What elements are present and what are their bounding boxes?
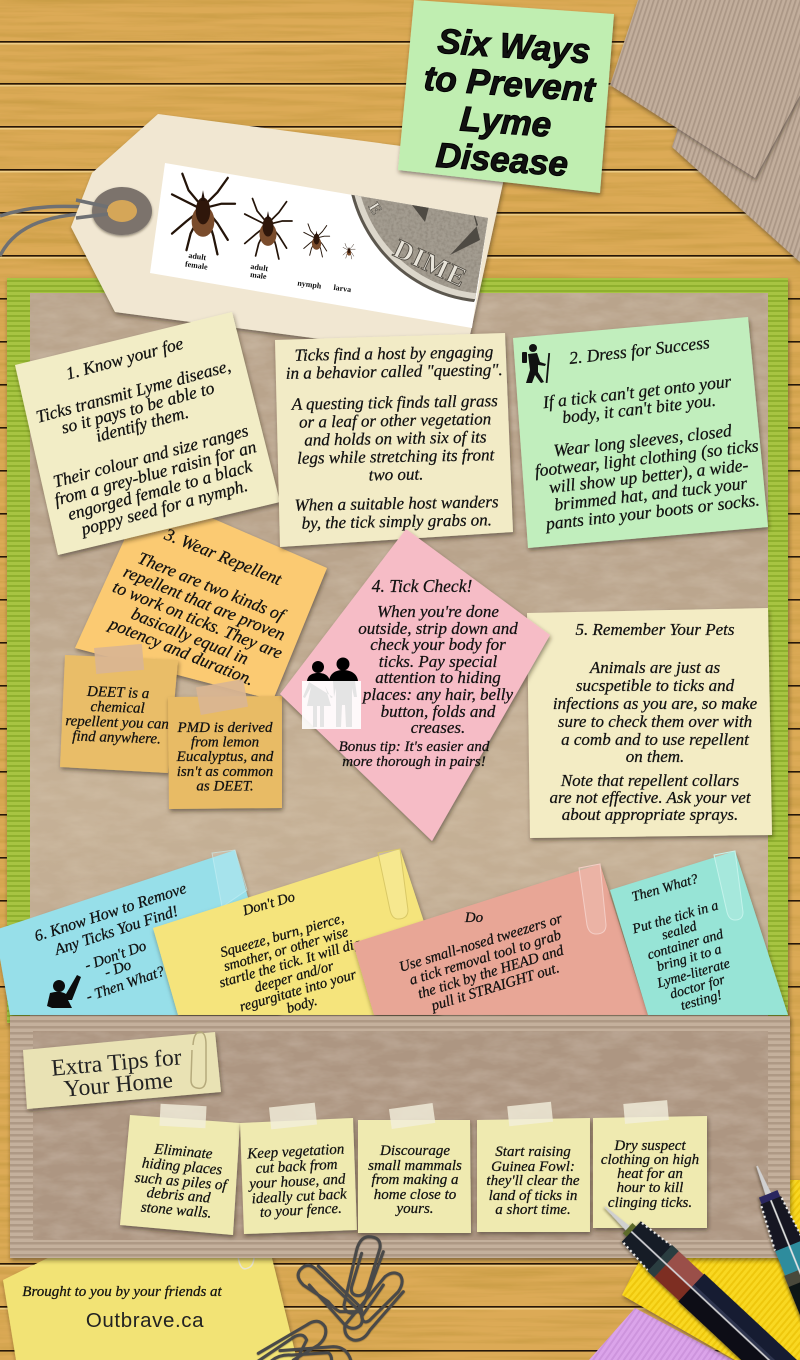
footer yellow note bbox=[3, 1250, 297, 1360]
note: then what: bring it to a bbox=[655, 942, 723, 975]
note: don't do: Don't Do bbox=[240, 889, 297, 919]
note 6: know how to remove: 6. Know How to Remove bbox=[33, 880, 189, 945]
body: attention to hiding bbox=[375, 668, 501, 687]
tip note 1: debris and bbox=[146, 1185, 211, 1207]
body: creases. bbox=[411, 718, 465, 737]
sticky: DEET: DEET is a bbox=[86, 684, 150, 702]
note: then what: sealed bbox=[660, 919, 700, 943]
note: then what bbox=[610, 851, 788, 1021]
note: do: a tick removal tool to grab bbox=[408, 927, 563, 989]
tip note 1 bbox=[120, 1104, 240, 1235]
panel: extra tips corrugated frame bbox=[10, 1016, 790, 1258]
small paperclip bbox=[238, 1256, 254, 1269]
note: questing explanation: two out. bbox=[368, 465, 424, 484]
tip note 1: hiding places bbox=[141, 1155, 223, 1178]
note 2: dress for success: If a tick can't get onto your bbox=[541, 371, 732, 412]
note: then what: container and bbox=[646, 927, 726, 963]
tick labels: larva bbox=[333, 283, 352, 294]
sticky: PMD bbox=[168, 679, 282, 809]
tip note 3: Discourage bbox=[379, 1143, 450, 1159]
tick labels: nymph bbox=[297, 278, 322, 291]
sticky: DEET: chemical bbox=[90, 699, 145, 717]
pen two bbox=[742, 1160, 800, 1360]
note 3: wear repellent: basically equal in bbox=[129, 603, 252, 668]
note 5: remember your pets bbox=[527, 608, 772, 838]
note 2: dress for success: body, it can't bite you. bbox=[561, 390, 717, 427]
tick: nymph bbox=[304, 224, 330, 257]
panel: green striped backing bbox=[7, 278, 788, 1023]
heading: 4. Tick Check! bbox=[372, 576, 472, 596]
note: questing explanation: A questing tick finds tall grass bbox=[291, 391, 498, 414]
note 1: know your foe: poppy seed for a nymph. bbox=[77, 475, 250, 539]
title text: Six Ways bbox=[436, 22, 592, 71]
tip note 2: to your fence. bbox=[259, 1201, 342, 1221]
dime bbox=[351, 194, 488, 302]
tip note 1: such as piles of bbox=[134, 1170, 229, 1194]
heading: extra tips note: Your Home bbox=[63, 1067, 174, 1103]
sticky: DEET bbox=[60, 644, 178, 773]
note 3: wear repellent: potency and duration. bbox=[105, 612, 257, 689]
note: questing explanation: When a suitable host wanders bbox=[294, 492, 499, 515]
note 5: remember your pets: infections as you are, so make bbox=[553, 694, 758, 713]
note: don't do: deeper and/or bbox=[253, 958, 336, 996]
note: don't do: smother, or other wise bbox=[222, 924, 351, 975]
tape bbox=[94, 644, 144, 674]
footer credit: Brought to you by your friends at bbox=[22, 1284, 223, 1300]
title text bbox=[417, 21, 600, 186]
note: then what: Put the tick in a bbox=[630, 898, 720, 938]
tip note 5 bbox=[593, 1100, 707, 1228]
note: do: Use small-nosed tweezers or bbox=[397, 911, 565, 976]
tip note 1: Eliminate bbox=[153, 1141, 213, 1163]
note: questing explanation: in a behavior called "questing". bbox=[286, 360, 503, 383]
note: don't do bbox=[153, 849, 440, 1033]
title text: Disease bbox=[435, 136, 569, 184]
tip note 2: your house, and bbox=[247, 1171, 346, 1193]
note 2: dress for success: 2. Dress for Success bbox=[568, 332, 711, 368]
note: then what: Then What? bbox=[630, 872, 700, 905]
tip note 2: ideally cut back bbox=[251, 1186, 347, 1207]
tip note 4 bbox=[477, 1102, 590, 1232]
body: outside, strip down and bbox=[358, 619, 518, 638]
note 2: dress for success: footwear, light clothing (so ticks bbox=[534, 435, 760, 481]
icon: pointing person bbox=[47, 975, 81, 1008]
tip note 5: clothing on high bbox=[601, 1152, 699, 1168]
tick labels: female bbox=[185, 259, 209, 272]
note 2: dress for success: brimmed hat, and tuck your bbox=[553, 473, 748, 515]
note 6: know how to remove: Any Ticks You Find! bbox=[52, 903, 180, 959]
note 5: remember your pets: 5. Remember Your Pets bbox=[576, 620, 735, 639]
sticky: PMD: from lemon bbox=[191, 734, 259, 750]
tip note 2 bbox=[240, 1103, 357, 1234]
note: don't do: body. bbox=[285, 993, 319, 1017]
note 6: know how to remove bbox=[0, 850, 280, 1015]
note 3: wear repellent: There are two kinds of bbox=[135, 548, 289, 625]
footer brand: Outbrave.ca bbox=[86, 1309, 204, 1332]
note 3: wear repellent: 3. Wear Repellent bbox=[161, 524, 286, 589]
note 6: know how to remove: - Don't Do bbox=[83, 938, 149, 974]
body: ticks. Pay special bbox=[379, 652, 498, 671]
note 5: remember your pets: on them. bbox=[626, 747, 684, 766]
tip note 5: clinging ticks. bbox=[608, 1195, 692, 1211]
heading: extra tips note: Extra Tips for bbox=[50, 1044, 183, 1082]
note 3: wear repellent: repellent that are proven bbox=[121, 561, 288, 644]
tick labels bbox=[185, 251, 352, 294]
tip note 3: home close to bbox=[374, 1187, 457, 1203]
body: button, folds and bbox=[381, 702, 496, 721]
note 6: know how to remove: - Do bbox=[103, 957, 134, 981]
note 6: know how to remove: - Then What? bbox=[84, 964, 167, 1005]
tip note 2: Keep vegetation bbox=[246, 1141, 345, 1163]
heading: extra tips note bbox=[23, 1032, 221, 1109]
tip note 5: hour to kill bbox=[617, 1180, 683, 1196]
tip note 3: from making a bbox=[372, 1172, 458, 1188]
sticky: DEET: find anywhere. bbox=[72, 728, 161, 748]
bonus tip: more thorough in pairs! bbox=[342, 754, 486, 770]
tick labels: adult bbox=[188, 251, 207, 262]
icon: hiker bbox=[522, 344, 550, 383]
paperclip bbox=[714, 851, 743, 920]
tip note 3: small mammals bbox=[368, 1158, 462, 1174]
title note bbox=[398, 0, 614, 193]
tip note 5: heat for an bbox=[617, 1166, 683, 1182]
note 5: remember your pets: Animals are just as bbox=[589, 658, 720, 677]
tip note 2: cut back from bbox=[255, 1157, 338, 1177]
note 1: know your foe: identify them. bbox=[93, 402, 191, 446]
purple corrugated paper bbox=[589, 1308, 733, 1360]
tape bbox=[196, 679, 248, 715]
note: then what: doctor for bbox=[668, 972, 727, 1002]
body: places: any hair, belly bbox=[362, 685, 514, 704]
note: do bbox=[353, 864, 648, 1020]
sticky: DEET: repellent you can bbox=[65, 713, 169, 733]
note 3: wear repellent: to work on ticks. They are bbox=[110, 576, 286, 663]
corrugated cardboard, top right bbox=[610, 0, 800, 262]
icon: couple bbox=[302, 658, 361, 729]
title text: Lyme bbox=[459, 99, 553, 145]
tip note 4: Start raising bbox=[495, 1144, 571, 1160]
note: then what: Lyme-literate bbox=[655, 956, 732, 992]
note: do: Do bbox=[464, 910, 484, 926]
tip note 4: Guinea Fowl: bbox=[491, 1159, 575, 1175]
note: then what: testing! bbox=[679, 988, 724, 1014]
note: questing explanation: legs while stretching its front bbox=[297, 445, 496, 468]
paperclip bbox=[378, 849, 408, 919]
tag paper bbox=[71, 114, 508, 358]
photo: tick sizes beside a dime bbox=[150, 163, 488, 328]
note: don't do: regurgitate into your bbox=[238, 967, 358, 1015]
sticky: PMD: PMD is derived bbox=[177, 720, 273, 736]
title text: to Prevent bbox=[423, 59, 597, 110]
paperclip bbox=[191, 1032, 206, 1088]
note 1: know your foe bbox=[15, 312, 280, 555]
tick: adult female bbox=[172, 174, 235, 254]
note 2: dress for success: will show up better), a wide- bbox=[548, 455, 749, 497]
bonus tip: Bonus tip: It's easier and bbox=[339, 739, 490, 755]
note 1: know your foe: engorged female to a black bbox=[65, 455, 255, 524]
tip note 3 bbox=[358, 1103, 471, 1233]
eyelet bbox=[76, 187, 152, 235]
note 5: remember your pets: a comb and to use repellent bbox=[561, 730, 750, 749]
tape bbox=[269, 1103, 317, 1129]
tick labels: adult bbox=[250, 262, 269, 273]
note: questing explanation: Ticks find a host by engaging bbox=[294, 342, 493, 365]
tip note 1: stone walls. bbox=[140, 1200, 212, 1222]
pen one bbox=[592, 1193, 800, 1360]
tick labels: male bbox=[250, 270, 268, 281]
note 1: know your foe: Ticks transmit Lyme disease, bbox=[34, 355, 233, 427]
panel: extra tips inner board bbox=[33, 1031, 768, 1240]
tip note 4: land of ticks in bbox=[489, 1188, 577, 1204]
note 1: know your foe: from a grey-blue raisin for an bbox=[52, 436, 259, 509]
note: questing explanation: and holds on with six of its bbox=[304, 427, 487, 450]
dime: DIME bbox=[389, 233, 472, 293]
note 1: know your foe: so it pays to be able to bbox=[59, 377, 217, 438]
note 5: remember your pets: Note that repellent collars bbox=[560, 771, 740, 790]
note: do: the tick by the HEAD and bbox=[416, 943, 566, 1002]
tick: larva bbox=[343, 243, 355, 259]
sticky: PMD: isn't as common bbox=[177, 764, 273, 780]
paperclip bbox=[579, 864, 606, 934]
note: questing explanation: or a leaf or other vegetation bbox=[299, 409, 491, 432]
note: questing explanation: by, the tick simply grabs on. bbox=[302, 510, 492, 533]
note 2: dress for success: Wear long sleeves, closed bbox=[552, 420, 733, 460]
tape bbox=[159, 1104, 207, 1128]
note: do: pull it STRAIGHT out. bbox=[429, 960, 561, 1015]
tip note 4: a short time. bbox=[495, 1202, 571, 1218]
note 5: remember your pets: are not effective. Ask your vet bbox=[549, 788, 752, 807]
note: questing explanation bbox=[275, 333, 513, 547]
tick: adult male bbox=[245, 199, 292, 259]
note 2: dress for success: pants into your boots or socks. bbox=[543, 489, 761, 534]
paperclip bbox=[212, 850, 247, 907]
note 5: remember your pets: sure to check them over with bbox=[558, 712, 752, 731]
sticky: PMD: as DEET. bbox=[196, 778, 254, 794]
note: don't do: startle the tick. It will dig bbox=[217, 936, 363, 991]
note 1: know your foe: Their colour and size ranges bbox=[51, 420, 251, 491]
string through tag eyelet bbox=[0, 206, 112, 256]
sticky: PMD: Eucalyptus, and bbox=[176, 749, 274, 765]
note 4: tick check diamond bbox=[280, 529, 550, 841]
dime: E bbox=[365, 200, 385, 218]
note 3: wear repellent bbox=[75, 490, 327, 700]
body: check your body for bbox=[370, 635, 506, 654]
tip note 5: Dry suspect bbox=[613, 1138, 686, 1154]
paperclips pile bbox=[257, 1237, 403, 1360]
tape bbox=[623, 1100, 669, 1124]
tape bbox=[389, 1103, 435, 1129]
note: don't do: Squeeze, burn, pierce, bbox=[218, 910, 346, 961]
panel: kraft paper board bbox=[30, 293, 768, 1018]
tip note 4: they'll clear the bbox=[486, 1173, 580, 1189]
yellow corrugated paper bbox=[622, 1180, 800, 1360]
note 2: dress for success bbox=[513, 317, 768, 548]
body: When you're done bbox=[377, 602, 499, 621]
tape bbox=[507, 1102, 553, 1126]
tip note 3: yours. bbox=[394, 1201, 434, 1217]
note 1: know your foe: 1. Know your foe bbox=[64, 333, 185, 383]
note 5: remember your pets: sucspetible to ticks and bbox=[576, 676, 735, 695]
luggage tag with tick photo bbox=[70, 114, 507, 340]
note 5: remember your pets: about appropriate sprays. bbox=[562, 805, 738, 824]
